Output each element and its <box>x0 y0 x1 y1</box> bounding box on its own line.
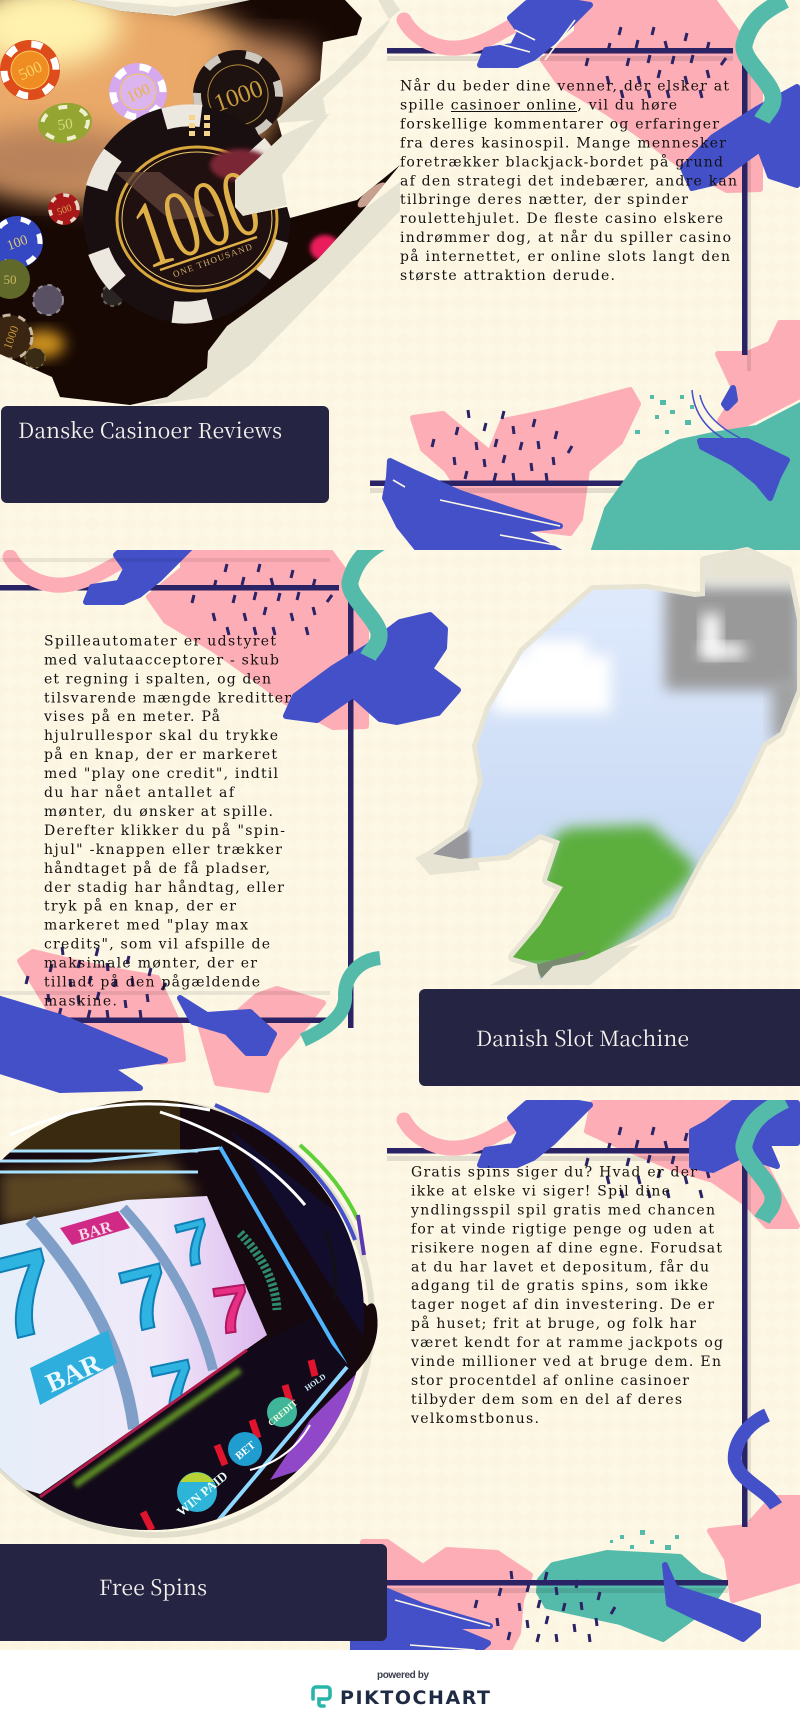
image: slot machine photo: BET <box>233 1439 258 1462</box>
text block: free spins: for at vinde rigtige penge og uden at <box>411 1221 714 1237</box>
panel: section 1 decoration <box>370 0 800 553</box>
chip: 1000 dark back: 1000 <box>210 75 267 118</box>
text block: intro: tilbringe deres nætter, der spinder <box>400 192 688 208</box>
text block: free spins: at du har lavet et depositum, får du <box>411 1258 709 1275</box>
text block: intro <box>400 78 737 284</box>
chip: 50 olive <box>38 102 92 144</box>
chip: small red: 500 <box>56 203 73 218</box>
heading box: Danske Casinoer Reviews <box>1 406 329 503</box>
chip: 1000 dark back <box>193 50 283 135</box>
image: slot machine photo <box>0 1100 378 1540</box>
text block: slot machine: tilladt på den pågældende <box>44 974 260 990</box>
chip: small blue: 100 <box>5 233 30 254</box>
icon: Piktochart logo <box>313 1687 330 1706</box>
heading box: Danish Slot Machine <box>419 989 800 1086</box>
text block: free spins: stor procentdel af online casinoer <box>411 1373 689 1389</box>
image: slot machine photo: CREDIT <box>266 1398 299 1428</box>
image: slot machine photo: 7 <box>111 1244 182 1352</box>
chip: small dark <box>102 284 124 306</box>
chip: 50 olive: 50 <box>57 116 74 134</box>
text block: free spins: på huset; frit at bruge, og folk har <box>411 1315 696 1332</box>
text block: slot machine: mønter, du ønsker at spille. <box>44 804 273 820</box>
image: casino chips photo: 1000 <box>0 324 22 351</box>
text block: intro: af den strategi det indebærer, andre kan <box>400 173 737 189</box>
text block: slot machine <box>43 633 291 1010</box>
chip: small blue <box>0 216 43 266</box>
text block: slot machine: markeret med "play max <box>44 918 248 934</box>
heading box: Free Spins <box>0 1544 387 1641</box>
text block: intro: fra deres kasinospil. Mange mennesker <box>400 135 726 151</box>
chip: small red <box>48 193 80 225</box>
image: slot machine photo: 7 <box>144 1342 206 1439</box>
text block: intro: Når du beder dine venner, der elsker at <box>400 78 729 94</box>
footer: powered by Piktochart <box>0 1650 800 1730</box>
text block: intro: spille casinoer online, vil du høre <box>400 98 677 114</box>
chip: 500 orange: 500 <box>16 59 45 84</box>
text block: free spins: Gratis spins siger du? Hvad er der <box>411 1164 697 1180</box>
text block: intro: roulettehjulet. De fleste casino elskere <box>400 211 723 227</box>
text block: free spins: risikere nogen af dine egne. Forudsat <box>411 1240 722 1256</box>
image: blurred landscape placeholder <box>415 545 800 990</box>
text block: slot machine: med "play one credit", indtil <box>44 766 279 782</box>
text block: intro: foretrækker blackjack-bordet på grund <box>400 153 723 170</box>
text block: free spins: tilbyder dem som en del af deres <box>411 1392 682 1408</box>
image: casino chips photo: 50 <box>4 272 16 287</box>
text block: free spins: været kendt for at ramme jackpots og <box>410 1335 723 1351</box>
image: slot machine photo: 7 <box>170 1206 220 1281</box>
footer: powered by Piktochart: powered by <box>377 1670 429 1681</box>
panel: section 2 decoration <box>0 537 458 1090</box>
text block: slot machine: Spilleautomater er udstyret <box>44 633 276 649</box>
text block: slot machine: maskine. <box>44 994 117 1010</box>
footer: powered by Piktochart: PIKTOCHART <box>340 1687 490 1709</box>
text block: slot machine: med valutaacceptorer - skub <box>44 652 279 668</box>
image: slot machine photo: 7 <box>209 1270 255 1348</box>
image: slot machine photo: WIN PAID <box>174 1468 230 1519</box>
text block: slot machine: håndtaget på de få pladser, <box>44 860 270 877</box>
image: slot machine photo: HOLD <box>303 1372 328 1393</box>
text block: free spins: yndlingsspil spil gratis med chancen <box>410 1202 715 1218</box>
chip: 100 lilac <box>109 63 167 121</box>
text block: slot machine: du har nået antallet af <box>44 784 236 801</box>
text block: intro: indrømmer dog, at når du spiller casino <box>400 229 731 246</box>
text block: slot machine: tilsvarende mængde kreditter <box>44 690 291 706</box>
text block: slot machine: vises på en meter. På <box>43 708 220 725</box>
chip: small grey <box>33 285 63 315</box>
text block: free spins: tager noget af din investering. De er <box>411 1297 714 1313</box>
text block: intro: største attraktion derude. <box>400 268 615 284</box>
text block: free spins: ikke at elske vi siger! Spil dine <box>411 1184 670 1200</box>
panel: section 3 decoration <box>353 1100 800 1652</box>
text block: slot machine: credits", som vil afspille de <box>44 937 270 953</box>
text block: slot machine: der stadig har håndtag, eller <box>44 879 284 896</box>
heading box: Danske Casinoer Reviews: Danske Casinoer Reviews <box>18 415 282 445</box>
chip: 100 lilac: 100 <box>124 81 153 106</box>
text block: free spins <box>410 1164 723 1427</box>
image: slot machine photo: BAR <box>41 1347 106 1398</box>
text block: slot machine: et regning i spalten, og den <box>44 671 271 687</box>
image: casino chips photo <box>0 0 400 410</box>
text block: free spins: adgang til de gratis spins, som ikke <box>411 1278 708 1294</box>
text block: intro: forskellige kommentarer og erfaringer <box>400 116 719 132</box>
chip: small olive <box>0 259 30 299</box>
chip: bottom gold <box>0 315 32 359</box>
text block: free spins: vinde millioner ved at bruge dem. En <box>410 1354 721 1370</box>
chip: main 1000 <box>83 104 291 324</box>
text block: slot machine: maksimale mønter, der er <box>44 956 257 972</box>
text block: slot machine: hjul" -knappen eller trækker <box>44 842 282 858</box>
chip: main 1000: 1000 <box>121 149 273 289</box>
text block: slot machine: tryk på en knap, der er <box>44 898 236 915</box>
image: slot machine photo: BAR <box>77 1218 114 1244</box>
text block: intro: på internettet, er online slots langt den <box>400 248 730 265</box>
chip: 500 orange <box>0 40 60 100</box>
text block: slot machine: Derefter klikker du på "spin- <box>44 822 285 839</box>
chip: main 1000: ONE THOUSAND <box>172 241 254 279</box>
text block: slot machine: på en knap, der er markeret <box>44 746 277 763</box>
text block: free spins: velkomstbonus. <box>410 1411 539 1427</box>
heading box: Free Spins: Free Spins <box>99 1572 207 1602</box>
text block: slot machine: hjulrullespor skal du trykke <box>44 728 278 744</box>
heading box: Danish Slot Machine: Danish Slot Machine <box>476 1023 689 1053</box>
